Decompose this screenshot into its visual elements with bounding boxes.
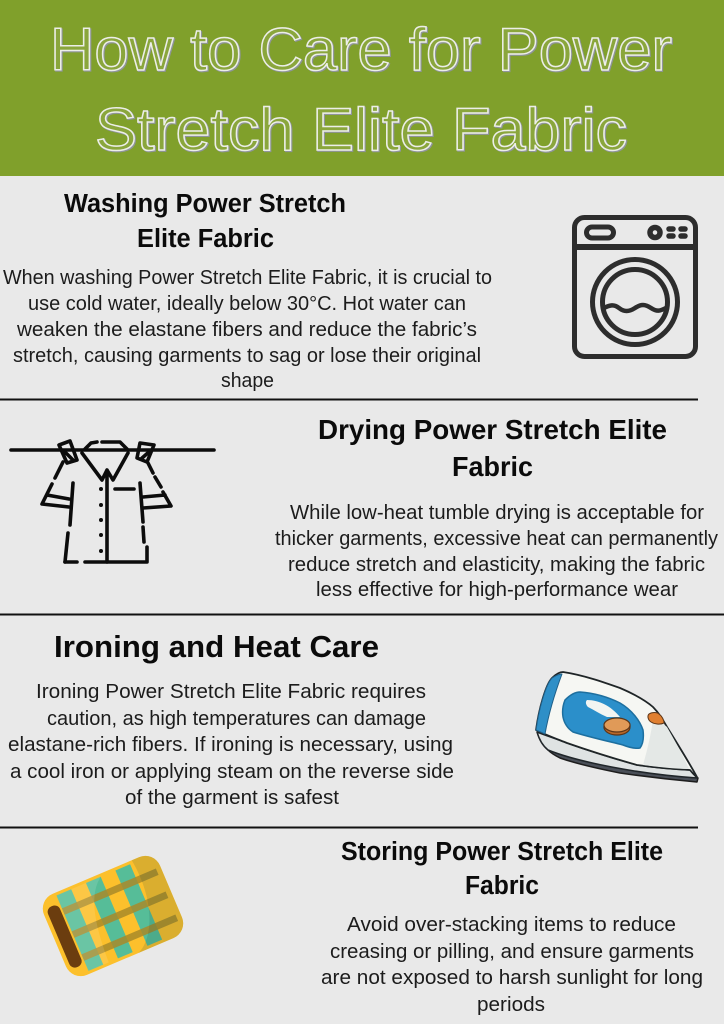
text block: washing: weaken the elastane fibers and reduce the fabric’s	[16, 319, 477, 341]
text block: storing: creasing or pilling, and ensure garments	[330, 941, 694, 963]
title: How to Care for Power	[50, 16, 672, 83]
heading: storing	[341, 838, 663, 900]
text block: washing: When washing Power Stretch Elite Fabric, it is crucial to	[3, 267, 492, 289]
text block: washing: shape	[221, 370, 274, 392]
heading: washing: Washing Power Stretch	[64, 190, 346, 218]
panel: ironing	[8, 630, 698, 809]
text block: ironing: of the garment is safest	[125, 787, 339, 809]
panel: washing	[3, 190, 696, 392]
text block: storing	[321, 914, 703, 1016]
heading: ironing: Ironing and Heat Care	[54, 630, 379, 664]
text block: washing	[3, 267, 492, 392]
text block: washing: use cold water, ideally below 30°C. Hot water can	[28, 293, 466, 315]
text block: storing: are not exposed to harsh sunlight for long	[321, 967, 703, 989]
text block: ironing: a cool iron or applying steam on the reverse side	[10, 761, 454, 783]
panel: storing	[38, 838, 703, 1016]
heading: storing: Storing Power Stretch Elite	[341, 838, 663, 866]
icon: rolled fabric	[42, 856, 184, 976]
title	[50, 16, 673, 164]
heading: storing: Fabric	[465, 872, 539, 900]
heading: drying: Drying Power Stretch Elite	[318, 414, 667, 445]
text block: washing: stretch, causing garments to sag or lose their original	[13, 345, 481, 367]
title: Stretch Elite Fabric	[95, 96, 627, 163]
text block: drying: While low-heat tumble drying is acceptable for	[290, 502, 704, 524]
text block: drying: thicker garments, excessive heat can permanently	[275, 528, 718, 550]
icon: shirt on clothesline	[11, 441, 214, 562]
heading: drying	[318, 414, 667, 482]
text block: ironing: caution, as high temperatures can damage	[47, 708, 426, 730]
title: Stretch Elite Fabric	[96, 97, 628, 164]
text block: ironing: elastane-rich fibers. If ironing is necessary, using	[8, 734, 453, 756]
title: How to Care for Power	[51, 17, 673, 84]
heading: drying: Fabric	[452, 451, 533, 482]
panel: drying	[11, 414, 718, 601]
text block: drying	[275, 502, 718, 601]
text block: drying: less effective for high-performance wear	[316, 579, 678, 601]
header banner	[0, 0, 724, 176]
text block: ironing: Ironing Power Stretch Elite Fabric requires	[36, 681, 426, 703]
heading: washing	[64, 190, 346, 253]
text block: storing: periods	[477, 994, 545, 1016]
text block: storing: Avoid over-stacking items to reduce	[347, 914, 676, 936]
text block: ironing	[8, 681, 454, 809]
text block: drying: reduce stretch and elasticity, making the fabric	[288, 554, 705, 576]
icon: washing machine	[574, 218, 696, 356]
heading: washing: Elite Fabric	[137, 225, 274, 253]
icon: iron	[536, 672, 698, 782]
